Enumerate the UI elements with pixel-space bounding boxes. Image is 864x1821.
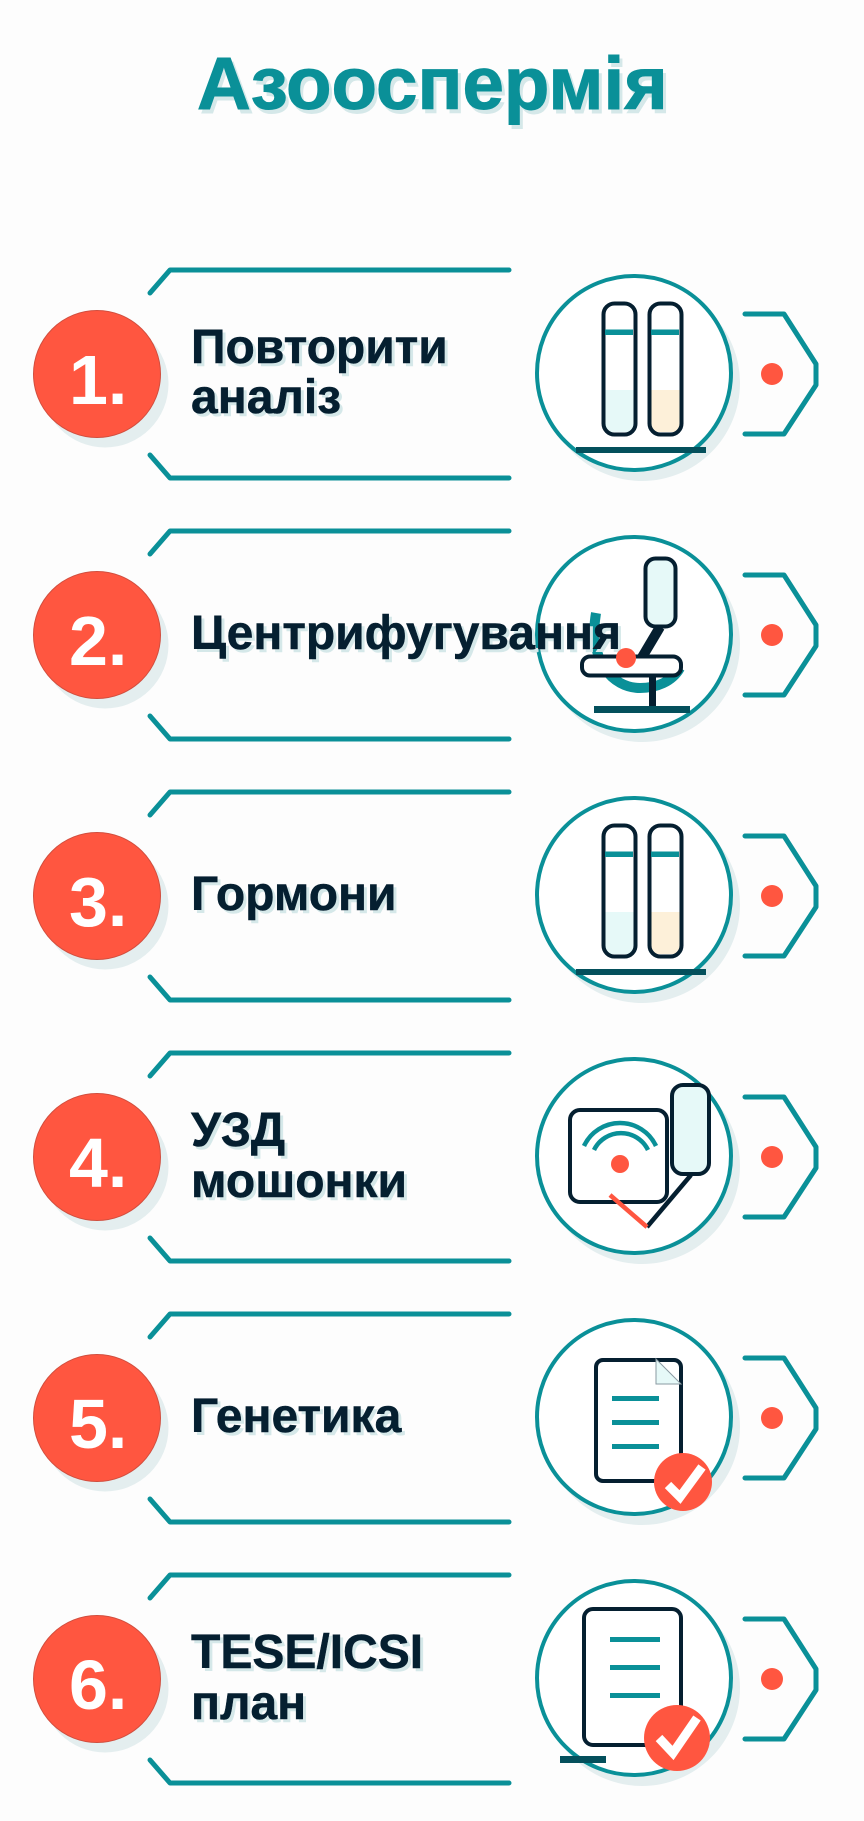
number badge: step 4: 4. (69, 1124, 127, 1202)
number badge: step 3: 3. (69, 863, 127, 941)
number badge: step 2 (34, 572, 168, 708)
arrow with dot: step 6 (745, 1619, 816, 1739)
icon: test tubes (576, 826, 706, 975)
step label: TESE/ICSI plan: TESE/ICSI (191, 1626, 423, 1679)
number badge: step 6 (34, 1616, 168, 1752)
icon: ultrasound machine (570, 1085, 709, 1227)
icon: test tubes (576, 304, 706, 453)
step label: repeat analysis: Повторити (191, 321, 448, 374)
arrow with dot: step 2 (745, 575, 816, 695)
arrow with dot: step 5 (745, 1358, 816, 1478)
icon ring: step 4 (537, 1059, 740, 1264)
bracket: step 2 (150, 531, 509, 739)
icon: centrifuge bowl arc (594, 613, 680, 688)
panel: step 3 (34, 792, 816, 1003)
step label: TESE/ICSI plan: план (191, 1677, 306, 1730)
panel: step 4 (34, 1053, 816, 1264)
bracket: step 5 (150, 1314, 509, 1522)
icon: plan document with check (560, 1609, 710, 1771)
step label: repeat analysis: аналіз (191, 371, 341, 424)
step label: scrotal ultrasound: мошонки (191, 1155, 407, 1208)
panel: step 5 (34, 1314, 816, 1525)
bracket: step 1 (150, 270, 509, 478)
number badge: step 5 (34, 1354, 168, 1492)
bracket: step 3 (150, 792, 509, 1000)
icon ring: step 5 (537, 1320, 740, 1525)
icon: microscope (582, 558, 690, 713)
icon ring: step 3 (537, 798, 740, 1003)
title: Азооспермія (197, 42, 668, 125)
number badge: step 1: 1. (69, 341, 127, 419)
bracket: step 4 (150, 1053, 509, 1261)
step label: genetics: Генетика (191, 1390, 402, 1443)
step label: centrifugation: Центрифугування (191, 607, 621, 660)
panel: step 2 (34, 531, 816, 742)
icon ring: step 2 (537, 537, 740, 742)
arrow with dot: step 3 (745, 836, 816, 956)
icon ring: step 6 (537, 1581, 740, 1786)
number badge: step 1 (34, 310, 168, 448)
panel: step 1 (34, 270, 816, 481)
number badge: step 4 (34, 1094, 168, 1230)
arrow with dot: step 1 (745, 314, 816, 434)
panel: step 6 (34, 1575, 816, 1786)
icon ring: step 1 (537, 276, 740, 481)
number badge: step 5: 5. (69, 1385, 127, 1463)
icon: document with check (596, 1359, 712, 1511)
number badge: step 2: 2. (69, 602, 127, 680)
step label: hormones: Гормони (191, 868, 397, 921)
arrow with dot: step 4 (745, 1097, 816, 1217)
bracket: step 6 (150, 1575, 509, 1783)
number badge: step 3 (34, 832, 168, 970)
step label: scrotal ultrasound: УЗД (191, 1104, 285, 1157)
number badge: step 6: 6. (69, 1646, 127, 1724)
